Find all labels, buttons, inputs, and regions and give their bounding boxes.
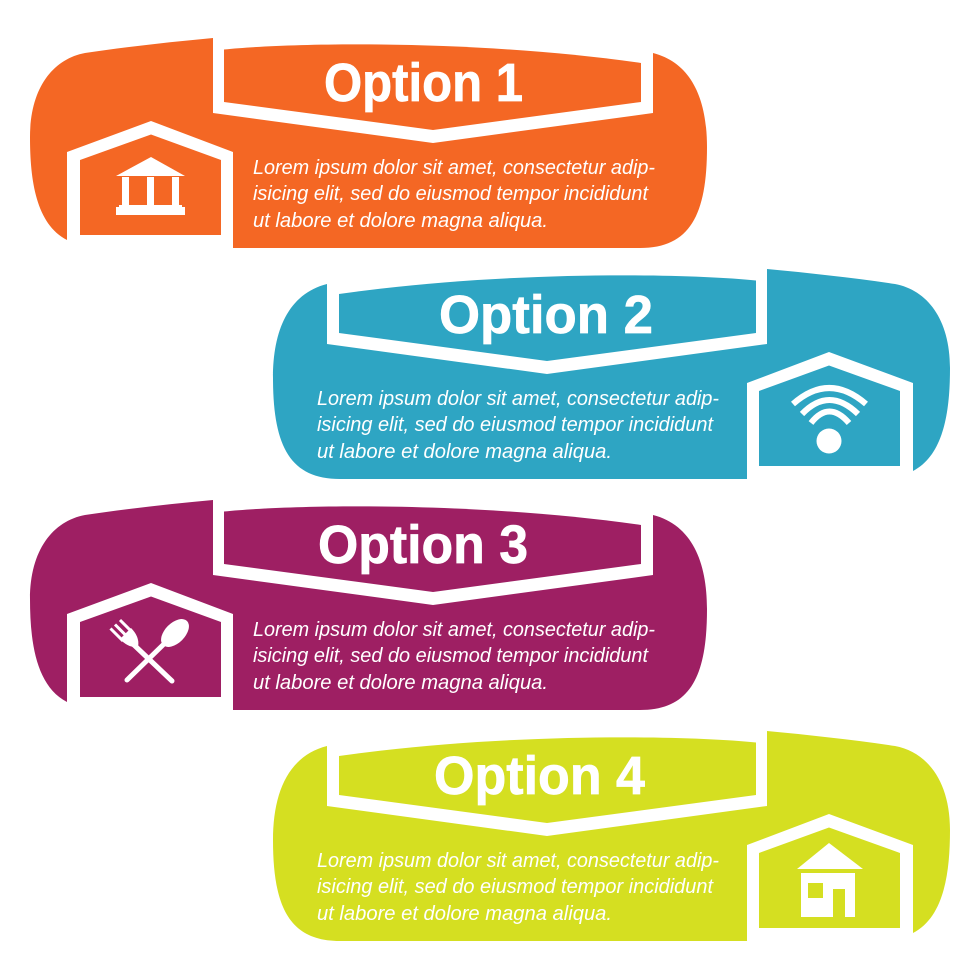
lime blob background [273, 731, 950, 941]
house frame [80, 134, 221, 235]
icon: fork and spoon [110, 614, 194, 681]
text block: Lorem ipsum dolor sit amet, consectetur adip- [253, 157, 655, 179]
panel: option 3 [30, 500, 707, 710]
text block: isicing elit, sed do eiusmod tempor incididunt [253, 645, 649, 667]
house frame [759, 828, 900, 928]
text block: isicing elit, sed do eiusmod tempor incididunt [253, 183, 649, 205]
icon: bank [116, 157, 185, 215]
blue blob background [273, 269, 950, 479]
heading: Option 1 [324, 53, 523, 113]
icon: home [797, 843, 863, 917]
text block: ut labore et dolore magna aliqua. [253, 672, 548, 694]
text block [317, 850, 719, 925]
house frame [80, 596, 221, 697]
title banner [224, 44, 641, 130]
purple blob background [30, 500, 707, 710]
text block: ut labore et dolore magna aliqua. [317, 903, 612, 925]
heading: Option 3 [318, 515, 528, 575]
house frame [759, 366, 900, 466]
text block [317, 388, 719, 463]
icon: wifi [793, 388, 866, 454]
heading: Option 4 [434, 746, 645, 806]
title banner [339, 737, 756, 823]
text block: Lorem ipsum dolor sit amet, consectetur adip- [317, 388, 719, 410]
panel: option 2 [273, 269, 950, 479]
text block: Lorem ipsum dolor sit amet, consectetur adip- [253, 619, 655, 641]
text block: ut labore et dolore magna aliqua. [253, 210, 548, 232]
text block [253, 157, 655, 232]
panel: option 4 [273, 731, 950, 941]
text block [253, 619, 655, 694]
heading: Option 2 [439, 285, 653, 345]
text block: Lorem ipsum dolor sit amet, consectetur adip- [317, 850, 719, 872]
text block: isicing elit, sed do eiusmod tempor incididunt [317, 414, 714, 436]
title banner [339, 275, 756, 361]
orange blob background [30, 38, 707, 248]
panel: option 1 [30, 38, 707, 248]
title banner [224, 506, 641, 592]
text block: isicing elit, sed do eiusmod tempor incididunt [317, 876, 714, 898]
text block: ut labore et dolore magna aliqua. [317, 441, 612, 463]
